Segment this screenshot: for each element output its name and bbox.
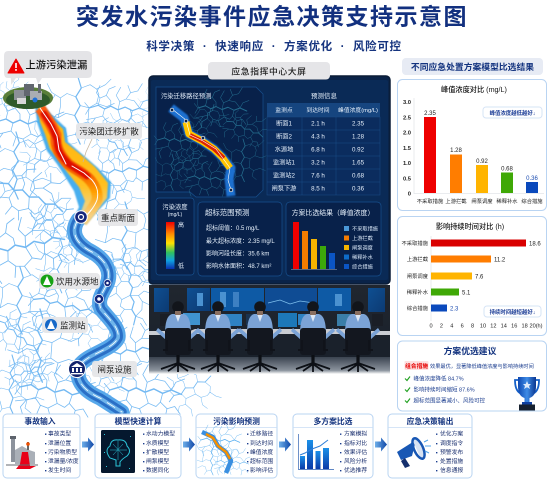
panel: concentration legend: 污染浓度 [162,202,188,211]
panel: duration bar chart: 不采取措施 [402,239,429,247]
arrow [82,438,94,452]
panel: duration bar chart: 5.1 [462,290,471,296]
river downstream [74,220,122,412]
flow step 5: decision output: 优化方案 [440,430,463,438]
panel: peak concentration bar chart: 0.92 [476,159,488,165]
panel: forecast table: 1.65 [352,160,365,166]
panel: duration bar chart: 稀释补水 [407,288,429,296]
panel: duration bar chart: 14 [501,324,507,330]
panel: exceedance forecast: 超标阈值：0.5 mg/L [206,224,260,232]
icon: trophy [515,377,539,410]
callout: monitoring station [42,317,88,333]
flow step 2: fast model computation: 数据同化 [146,466,169,474]
panel: duration bar chart: 2.3 [450,306,459,312]
plume yellow [38,106,108,222]
icon: factory leak [6,436,38,469]
flow step 2: fast model computation: 水动力模型 [146,430,175,438]
panel: recommendation: 组合措施 [405,362,428,370]
flow arrows [40,108,98,220]
panel: recommendation: 效果最优，显著降低峰值浓度与影响持续时间 [430,362,534,370]
river markers [94,280,111,304]
panel: scheme comparison mini chart: 综合措施 [352,262,373,270]
icon: AI brain [101,430,135,473]
panel: peak concentration bar chart: 综合措施 [521,197,543,205]
panel: forecast table: 2.1 h [311,120,325,128]
flow step 1: incident input: 泄漏量/浓度 [48,457,79,465]
panel: scheme comparison mini chart: 上游拦截 [352,234,373,242]
flow step 2: fast model computation: 闸泵模型 [146,457,169,465]
callout: shorter is better [484,306,541,317]
panel: forecast table: 闸泵下游 [272,184,296,192]
callout: shorter is better: 持续时间越短越好↓ [490,308,535,316]
plume orange and red core [40,108,97,222]
callout: key section [75,209,138,226]
panel: peak concentration bar chart: 上游拦截 [445,197,467,205]
callout: drinking water source [39,273,100,289]
callout: sluice pump [68,360,137,378]
panel: recommendation: 超标范围显著减小、风险可控 [414,396,486,404]
panel: forecast table: 监测点 [275,106,293,114]
callout: upstream leak: 上游污染泄漏 [26,58,87,72]
heading: model comparison results [402,58,543,75]
panel: forecast table: 1.28 [352,134,365,140]
panel: duration bar chart: 2 [440,324,443,330]
panel: forecast table: 监测站1 [273,158,296,166]
flow step 3: impact prediction: 污染影响预测 [213,416,260,426]
panel: forecast table: 2.35 [352,120,365,128]
callout: big screen title [208,62,330,80]
panel: forecast table: 到达时间 [306,106,330,114]
flow step 3: impact prediction: 影响评估 [250,466,273,474]
panel: peak concentration bar chart: 0 [408,192,411,198]
panel: duration bar chart: 0 [429,324,433,330]
panel: scheme comparison mini chart: 稀释补水 [352,253,374,261]
icon: warning [8,59,24,73]
river network background [0,72,224,423]
panel: forecast table: 峰值浓度(mg/L) [338,106,378,114]
callout: lower is better: 峰值浓度越低越好↓ [490,109,535,117]
flow step 2: fast model computation: 水质模型 [146,439,169,447]
panel: duration bar chart: 闸泵调度 [407,272,429,280]
flow step 3: impact prediction: 到达时间 [250,439,273,447]
flow step 5: decision output: 信息通报 [440,466,463,474]
flow step 3: impact prediction: 峰值浓度 [250,448,273,456]
panel: scheme comparison mini chart: 闸泵调度 [352,244,373,252]
subtitle: 科学决策 · 快速响应 · 方案优化 · 风险可控 [146,39,402,53]
panel: concentration legend: (mg/L) [168,212,183,218]
panel: river pollution map [35,104,122,412]
panel: duration bar chart: 7.6 [475,274,484,280]
panel: command center big screen [149,76,390,284]
panel: peak concentration bar chart: 稀释补水 [496,197,518,205]
panel: forecast table [267,91,380,195]
panel: exceedance forecast: 影响水体面积：48.7 km² [206,262,271,270]
panel: peak concentration bar chart: 不采取措施 [417,197,444,205]
flow step 5: decision output: 应急决策输出 [407,416,454,426]
panel: peak concentration bar chart: 闸泵调度 [471,197,493,205]
panel: forecast table: 0.36 [352,186,365,192]
panel: forecast table: 0.92 [352,146,365,154]
flow step 1: incident input: 泄漏位置 [48,439,71,447]
callout: upstream leak [4,51,92,85]
panel: concentration legend: 低 [178,262,184,270]
plume outer blue [35,104,111,224]
panel: duration bar chart: 10 [480,324,486,330]
panel: exceedance forecast: 超标范围预测 [205,208,249,217]
flow step 5: decision output: 预警发布 [440,448,463,456]
panel: peak concentration bar chart: 0.68 [501,166,513,172]
panel: peak concentration bar chart: 2.5 [403,115,412,121]
panel: peak concentration bar chart: 2.35 [424,111,436,117]
panel: forecast table: 监测站2 [273,172,296,180]
flow step 1: incident input: 事故输入 [24,416,56,426]
panel: concentration legend: 高 [178,221,184,229]
flow step 5: decision output: 处置措施 [440,457,463,465]
icon: industrial site [3,84,53,109]
callout: plume migration: 污染团迁移扩散 [79,126,139,136]
callout: monitoring station: 监测站 [60,320,86,330]
flow step 4: scheme comparison [293,414,373,478]
callout: plume migration [76,123,142,162]
panel: duration bar chart: 上游拦截 [407,255,429,263]
icon: megaphone [397,437,431,468]
flow step 4: scheme comparison: 指标对比 [344,439,367,447]
panel: peak concentration bar chart: 2.0 [403,130,411,136]
panel: forecast table: 水源地 [275,146,293,154]
panel: forecast table: 预测信息 [311,91,338,100]
flow step 1: incident input: 事故类型 [48,430,71,438]
panel: exceedance forecast: 最大超标浓度：2.35 mg/L [206,237,275,245]
flow step 3: impact prediction [196,414,277,478]
panel: duration bar chart: 16 [511,324,517,330]
icon: chart [298,434,334,470]
panel: duration bar chart: 12 [490,324,497,330]
panel: forecast table: 断面2 [276,132,292,140]
flow step 3: impact prediction: 超标范围 [250,457,273,465]
icon: mini river map [197,424,250,475]
panel: duration bar chart: 综合措施 [407,304,429,312]
panel: duration bar chart: 6 [461,324,464,330]
panel: forecast table: 断面1 [276,120,292,128]
panel: migration path map [154,87,271,197]
panel: forecast table: 4.3 h [311,134,325,140]
flow step 3: impact prediction: 迁移路径 [250,430,273,438]
panel: peak concentration bar chart: 峰值浓度对比 (mg/L) [441,85,507,94]
panel: exceedance forecast: 影响河段长度：35.6 km [206,250,269,258]
panel: forecast table: 0.68 [352,172,365,180]
flow step 2: fast model computation [95,414,181,478]
panel: recommendation: 峰值浓度降低 84.7% [414,374,464,382]
panel: peak concentration bar chart: 0.5 [403,176,412,182]
callout: drinking water source: 饮用水源地 [56,276,99,286]
panel: forecast table: 8.5 h [311,186,325,192]
callout: lower is better [483,107,542,118]
arrow [183,438,195,452]
panel: migration path map: 污染迁移路径预测 [161,91,211,100]
panel: duration bar chart [398,216,546,336]
arrow [375,438,387,452]
callout: sluice pump: 闸泵设施 [97,364,132,374]
flow step 4: scheme comparison: 效果评估 [344,448,367,456]
panel: duration bar chart: 11.2 [494,258,506,264]
panel: forecast table: 3.2 h [311,160,325,166]
flow step 4: scheme comparison: 优选推荐 [344,466,367,474]
heading: model comparison results: 不同应急处置方案模型比选结果 [411,61,534,72]
flow step 4: scheme comparison: 多方案比选 [314,416,353,426]
panel: peak concentration bar chart: 1.0 [403,161,411,167]
flow step 1: incident input: 发生时间 [48,466,71,474]
panel: peak concentration bar chart: 3.0 [403,100,411,106]
flow step 1: incident input: 污染物质型 [48,448,77,456]
arrow [279,438,291,452]
panel: scheme comparison mini chart [286,202,381,276]
flow step 5: decision output: 调度指令 [440,439,463,447]
panel: duration bar chart: 20(h) [529,324,543,330]
callout: big screen title: 应急指挥中心大屏 [231,66,307,76]
panel: recommendation [398,341,546,411]
panel: peak concentration bar chart: 1.28 [450,148,462,154]
panel: forecast table: 6.8 h [311,146,325,154]
control room illustration [149,285,390,374]
flow step 2: fast model computation: 模型快速计算 [115,416,162,426]
panel: duration bar chart: 影响持续时间对比 (h) [436,222,504,231]
panel: exceedance forecast [198,202,282,276]
panel: duration bar chart: 18 [521,324,528,330]
panel: recommendation: 方案优选建议 [444,345,497,356]
title: 突发水污染事件应急决策支持示意图 [76,4,468,30]
panel: concentration legend [156,198,194,275]
callout: key section: 重点断面 [101,213,135,223]
panel: forecast table: 7.6 h [311,172,325,180]
flow step 2: fast model computation: 扩散模型 [146,448,169,456]
flow step 4: scheme comparison: 方案模拟 [344,430,367,438]
panel: peak concentration bar chart [398,80,546,210]
panel: duration bar chart: 4 [450,324,453,330]
panel: scheme comparison mini chart: 不采取措施 [352,224,378,232]
panel: peak concentration bar chart: 0.36 [526,176,538,182]
flow step 1: incident input [3,414,80,478]
panel: recommendation: 影响持续时间缩短 87.6% [414,386,475,394]
panel: peak concentration bar chart: 1.5 [403,146,412,152]
flow step 4: scheme comparison: 风险分析 [344,457,367,465]
panel: duration bar chart: 8 [471,324,474,330]
panel: duration bar chart: 18.6 [529,242,541,248]
panel: scheme comparison mini chart: 方案比选结果（峰值浓度） [292,208,374,217]
flow step 5: decision output [388,414,472,478]
